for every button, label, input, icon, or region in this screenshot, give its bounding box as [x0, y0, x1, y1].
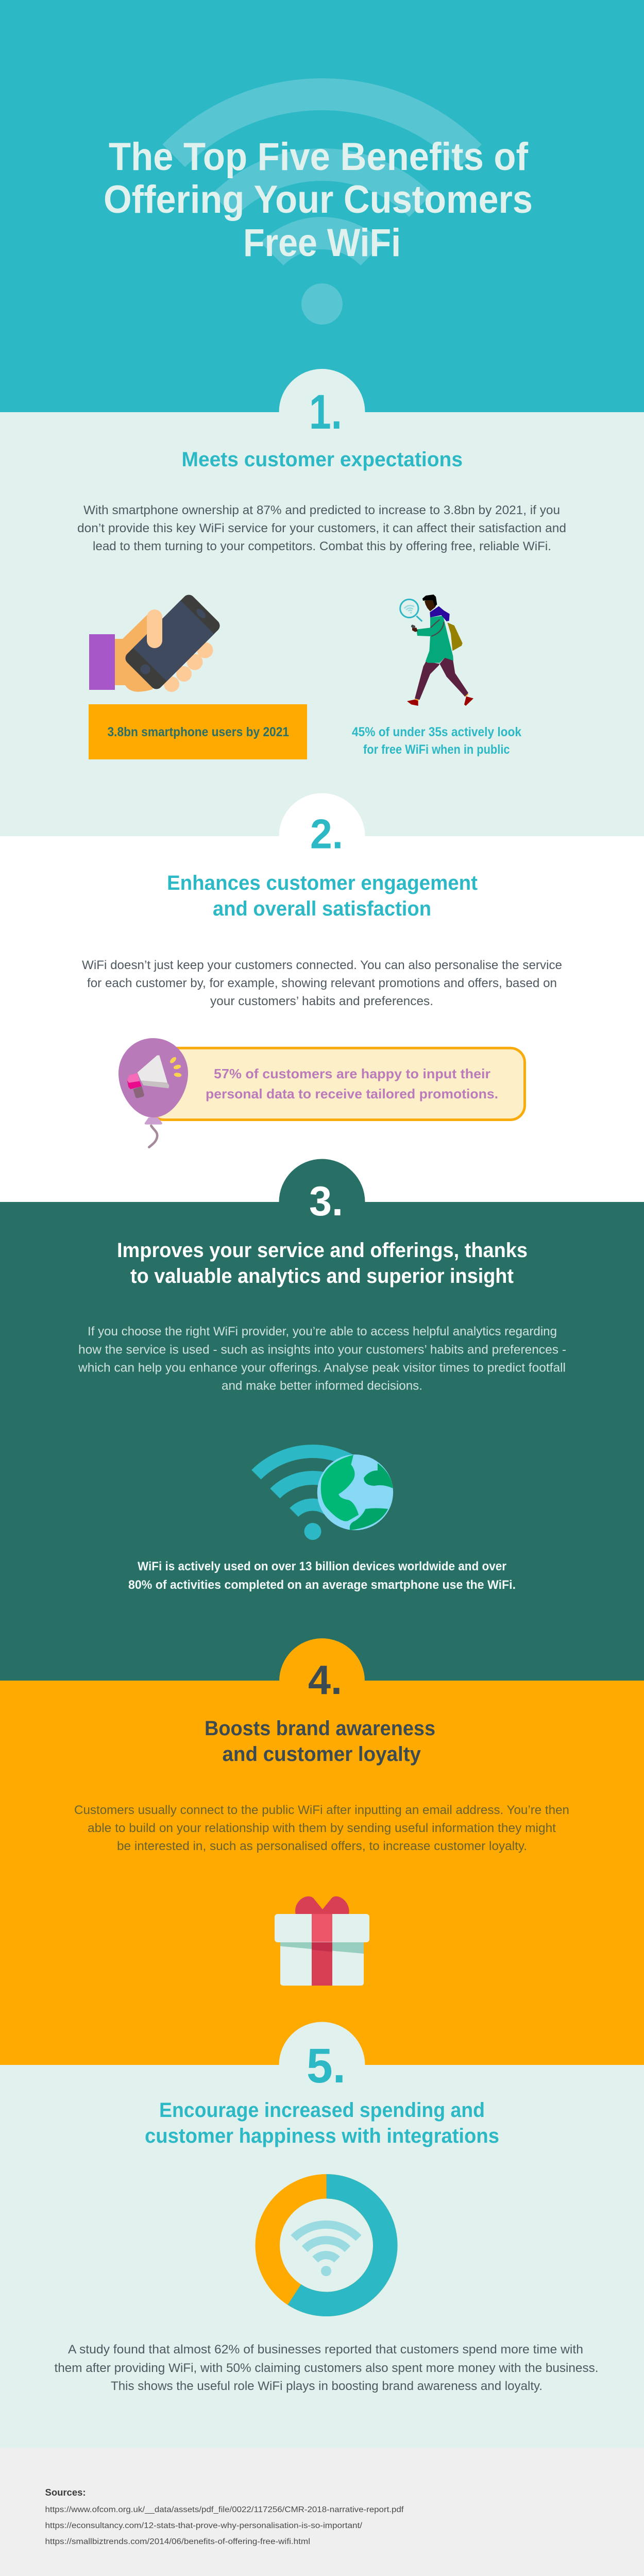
panel: section 3 — [0, 1159, 644, 1681]
heading: meets customer expectations: Meets customer expectations — [181, 448, 463, 471]
panel: header — [0, 0, 644, 412]
stat text: under 35s — [352, 725, 521, 757]
text block: section 2 body: for each customer by, for example, showing relevant promotions and offers, based on — [87, 976, 557, 990]
heading: encourage increased spending: Encourage increased spending and — [159, 2099, 485, 2122]
heading: boosts brand awareness: Boosts brand awareness — [205, 1717, 435, 1740]
callout: tailored promotions — [149, 1048, 524, 1120]
text block: section 3 stat: 80% of activities completed on an average smartphone use the WiFi. — [128, 1578, 516, 1592]
heading: encourage increased spending: customer happiness with integrations — [145, 2125, 499, 2147]
text block: section 2 body: WiFi doesn’t just keep your customers connected. You can also personalise the service — [82, 958, 562, 972]
text block: section 3 body: If you choose the right WiFi provider, you’re able to access helpful analytics regarding — [88, 1325, 557, 1338]
text block: section 4 body — [74, 1803, 569, 1853]
heading: improves your service: Improves your service and offerings, thanks — [117, 1239, 528, 1262]
text block: section 3 body — [78, 1325, 566, 1393]
heading: encourage increased spending — [145, 2099, 499, 2147]
text block: source links: https://smallbiztrends.com/2014/06/benefits-of-offering-free-wifi.html — [45, 2537, 310, 2546]
callout: tailored promotions: personal data to receive tailored promotions. — [206, 1086, 498, 1101]
panel: section 2 — [0, 793, 644, 1202]
text block: section 5 body: them after providing WiFi, with 50% claiming customers also spent more money with the business. — [55, 2361, 599, 2375]
text block: section 4 body: able to build on your relationship with them by sending useful information they might — [88, 1821, 556, 1835]
stat text: under 35s: 45% of under 35s actively look — [352, 725, 521, 739]
text block: source links: https://econsultancy.com/12-stats-that-prove-why-personalisation-is-so-important/ — [45, 2521, 363, 2530]
text block: section 1 body — [77, 503, 566, 553]
number 4: 4. — [308, 1657, 342, 1703]
stat text: under 35s: for free WiFi when in public — [363, 742, 510, 757]
text block: section 5 body: This shows the useful role WiFi plays in boosting brand awareness and loyalty. — [111, 2379, 543, 2393]
number 1: 1. — [309, 385, 342, 439]
number 3: 3. — [309, 1178, 343, 1225]
stat box: smartphone users — [89, 704, 307, 759]
heading: improves your service — [117, 1239, 528, 1287]
text block: section 4 body: be interested in, such as personalised offers, to increase customer loyalty. — [117, 1839, 527, 1853]
heading: enhances customer engagement: Enhances customer engagement — [167, 872, 478, 894]
heading: enhances customer engagement: and overall satisfaction — [213, 897, 431, 920]
panel: section 1 — [0, 369, 644, 836]
text block: section 1 body: don’t provide this key WiFi service for your customers, it can affect their satisfaction and — [77, 521, 566, 535]
icon: large wifi background — [174, 94, 470, 325]
heading: enhances customer engagement — [167, 872, 478, 920]
text block: section 3 stat — [128, 1560, 516, 1592]
text block: source links: https://www.ofcom.org.uk/__data/assets/pdf_file/0022/117256/CMR-2018-narrative-report.pdf — [45, 2505, 404, 2514]
heading: sources: Sources: — [45, 2487, 86, 2498]
panel: sources footer — [0, 2448, 644, 2576]
title: Offering Your Customers — [104, 178, 533, 222]
stat box: smartphone users: 3.8bn smartphone users by 2021 — [107, 725, 289, 739]
heading: boosts brand awareness — [205, 1717, 435, 1766]
callout: tailored promotions: 57% of customers are happy to input their — [214, 1066, 490, 1081]
panel: section 4 — [0, 1638, 644, 2065]
text block: section 3 body: which can help you enhance your offerings. Analyse peak visitor times to predict footfall — [78, 1361, 566, 1375]
text block: section 3 body: and make better informed decisions. — [222, 1379, 422, 1393]
icon: gift box — [275, 1896, 369, 1986]
text block: section 1 body: lead to them turning to your competitors. Combat this by offering free, reliable WiFi. — [93, 539, 551, 553]
chart: donut with wifi — [267, 2187, 385, 2304]
heading: boosts brand awareness: and customer loyalty — [223, 1743, 421, 1766]
text block: section 3 stat: WiFi is actively used on over 13 billion devices worldwide and over — [138, 1560, 506, 1573]
text block: section 1 body: With smartphone ownership at 87% and predicted to increase to 3.8bn by 2021, if you — [83, 503, 560, 517]
text block: section 5 body — [55, 2343, 599, 2393]
title — [104, 135, 533, 265]
icon: person searching for wifi — [400, 595, 473, 706]
icon: balloon with megaphone — [118, 1038, 188, 1147]
text block: section 3 body: how the service is used - such as insights into your customers’ habits and preferences - — [78, 1343, 566, 1357]
heading: improves your service: to valuable analytics and superior insight — [130, 1265, 514, 1287]
text block: source links — [45, 2505, 404, 2546]
title: The Top Five Benefits of — [109, 135, 529, 179]
text block: section 4 body: Customers usually connect to the public WiFi after inputting an email address. You’re then — [74, 1803, 569, 1817]
number 2: 2. — [310, 811, 343, 857]
text block: section 2 body: your customers’ habits and preferences. — [210, 994, 433, 1008]
text block: section 2 body — [82, 958, 562, 1008]
panel: section 5 — [0, 2022, 644, 2448]
icon: wifi and globe — [256, 1451, 393, 1540]
icon: hand holding smartphone — [89, 592, 223, 692]
text block: section 5 body: A study found that almost 62% of businesses reported that customers spend more time with — [68, 2343, 583, 2357]
title: Free WiFi — [243, 221, 401, 265]
number 5: 5. — [307, 2039, 346, 2093]
